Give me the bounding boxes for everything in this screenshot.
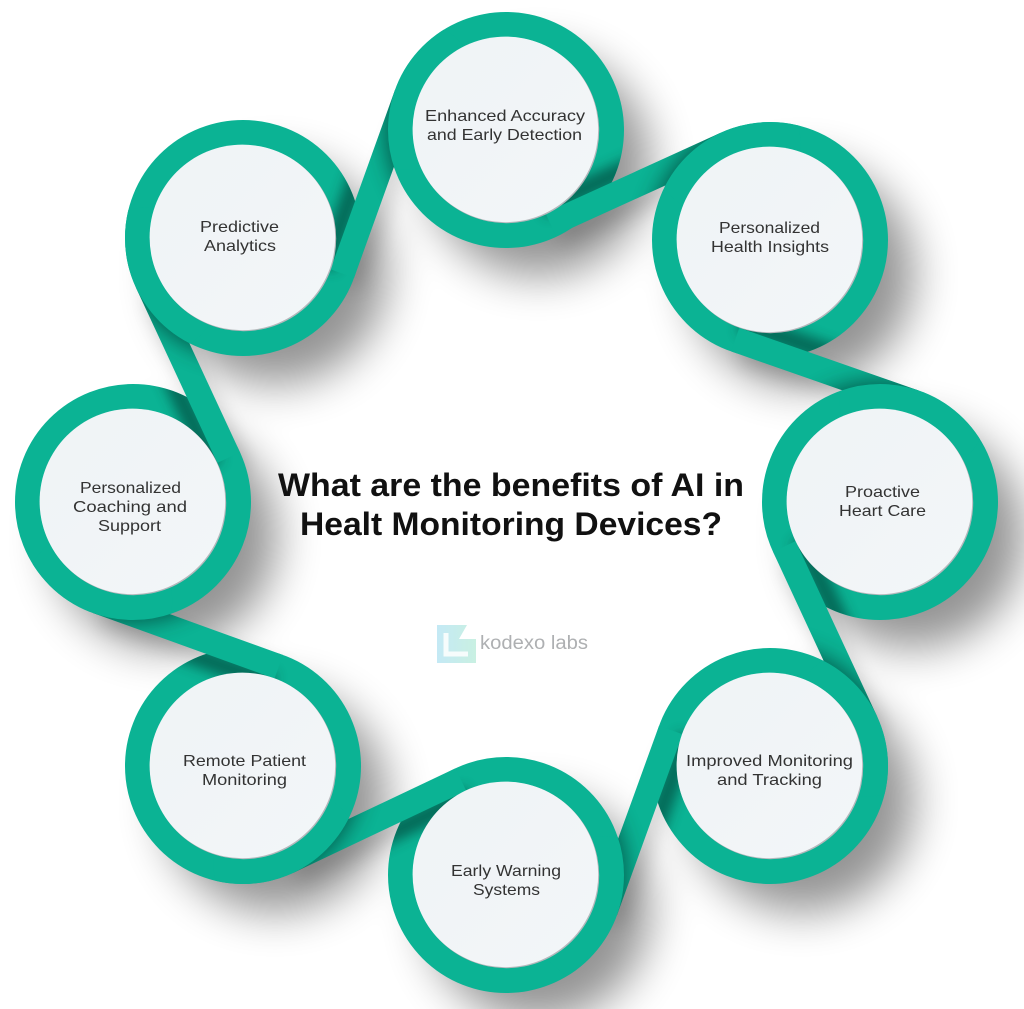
label: Predictive Analytics (200, 219, 279, 255)
logo: kodexo labs: kodexo labs (480, 633, 588, 654)
label: Personalized Coaching and Support: Coaching and (73, 499, 187, 516)
label: Personalized Health Insights (711, 220, 829, 256)
connecting ribbons (97, 94, 915, 911)
label: Improved Monitoring and Tracking: Improved Monitoring (686, 753, 853, 770)
label: Predictive Analytics: Predictive (200, 219, 279, 236)
label: Personalized Coaching and Support: Support (98, 518, 162, 535)
label: Early Warning Systems: Early Warning (451, 863, 561, 880)
label: Personalized Coaching and Support (73, 480, 187, 535)
label: Enhanced Accuracy and Early Detection (425, 108, 585, 144)
label: Proactive Heart Care: Proactive (845, 484, 920, 501)
label: Improved Monitoring and Tracking (686, 753, 853, 789)
label: Improved Monitoring and Tracking: and Tracking (717, 772, 822, 789)
label: Early Warning Systems (451, 863, 561, 899)
title: Healt Monitoring Devices? (300, 506, 722, 542)
label: Personalized Health Insights: Personalized (719, 220, 820, 237)
title: What are the benefits of AI in (278, 467, 744, 503)
logo: kodexo labs (437, 625, 588, 663)
label: Personalized Health Insights: Health Insights (711, 239, 829, 256)
faint ribbon shadows (105, 106, 923, 923)
label: Enhanced Accuracy and Early Detection: Enhanced Accuracy (425, 108, 585, 125)
label: Enhanced Accuracy and Early Detection: and Early Detection (427, 127, 582, 144)
title (278, 467, 744, 542)
label: Proactive Heart Care: Heart Care (839, 503, 926, 520)
label: Predictive Analytics: Analytics (204, 238, 276, 255)
label: Proactive Heart Care (839, 484, 926, 520)
ribbon shading where ribbons pass under the next ring (93, 90, 918, 915)
label: Remote Patient Monitoring (183, 753, 307, 789)
label: Personalized Coaching and Support: Personalized (80, 480, 181, 497)
ring shading beside ribbon exits (157, 153, 856, 852)
label: Remote Patient Monitoring: Remote Patient (183, 753, 307, 770)
label: Remote Patient Monitoring: Monitoring (202, 772, 287, 789)
label: Early Warning Systems: Systems (473, 882, 540, 899)
